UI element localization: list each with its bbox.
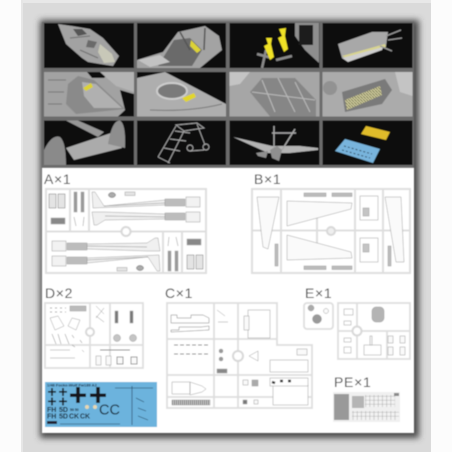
heading: C x 1: C×1 [165, 285, 193, 301]
sprue D [45, 303, 143, 368]
photo: aircraft [230, 120, 320, 165]
decal codes: CK [69, 414, 79, 420]
heading: A x 1: A×1 [44, 171, 71, 187]
sprue A lower half [52, 237, 203, 271]
decal codes: 50 50 [70, 408, 79, 412]
heading: E x 1: E×1 [305, 285, 332, 301]
main content [42, 22, 414, 433]
sprue E parts [304, 303, 410, 359]
decal sheet [45, 382, 157, 427]
photo: boarding ladder [137, 120, 226, 165]
panel: sprue sheet [42, 168, 414, 433]
photo: turret [137, 72, 226, 116]
photo: nose section [44, 23, 134, 68]
panel shadow [40, 20, 419, 438]
decal title: 1/48 Focke-Wulf Fw189 A2 [47, 382, 98, 388]
photo: nose glazing [44, 72, 134, 116]
photo: cockpit interior [137, 23, 226, 68]
photo: engine [322, 23, 412, 68]
photo: decals and photo-etch [322, 120, 412, 165]
decal crosses [48, 387, 106, 406]
heading: B x 1: B×1 [254, 171, 281, 187]
sprue A [46, 189, 206, 273]
sprue B [252, 189, 410, 273]
decal codes: 5D [59, 414, 68, 420]
photo-etch sheet [333, 392, 400, 422]
sprue C [167, 303, 312, 408]
heading: PE x 1: PE×1 [334, 374, 371, 390]
decal codes: CK [80, 414, 90, 420]
photo: engine installed [322, 72, 412, 116]
decal codes: 5D [59, 407, 68, 414]
heading: D x 2: D×2 [45, 285, 73, 301]
decal codes: FH [47, 414, 56, 420]
sprue A upper half [49, 192, 200, 226]
photo: yellow landing gear [230, 23, 320, 68]
decal codes: FH [47, 407, 56, 414]
decal codes: CC [99, 402, 120, 418]
panel: rendered photo grid [42, 22, 414, 168]
decal codes [47, 402, 120, 420]
photo: cockpit frame [230, 72, 320, 116]
photo: tail [44, 120, 134, 165]
